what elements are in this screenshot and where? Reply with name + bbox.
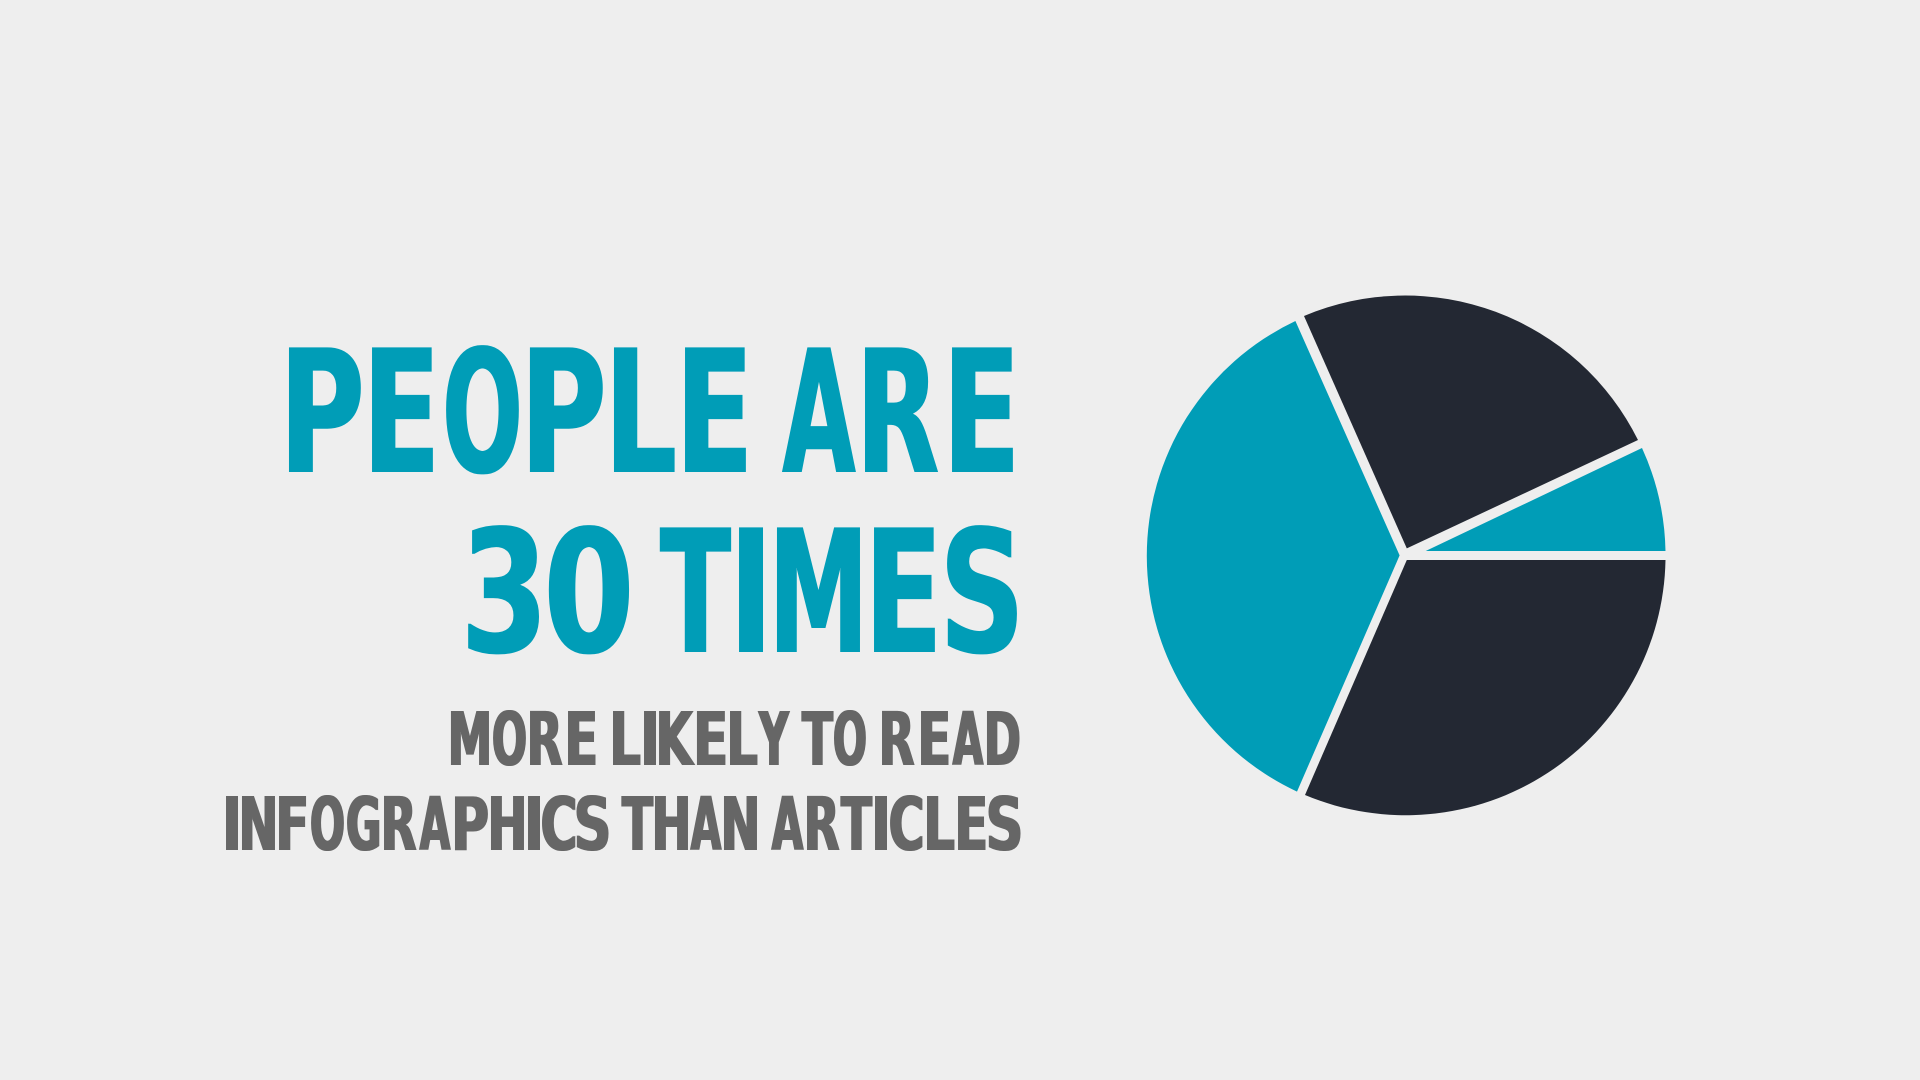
subheading line 2: N bbox=[239, 782, 278, 868]
subheading line 1: K bbox=[656, 697, 695, 783]
subheading line 2: A bbox=[691, 782, 721, 868]
subheading line 2: I bbox=[871, 782, 891, 868]
subheading line 2: E bbox=[954, 782, 988, 868]
subheading line 2: S bbox=[986, 782, 1023, 868]
subheading line 1: O bbox=[833, 697, 867, 783]
subheading line 1: E bbox=[693, 697, 728, 783]
subheading line 2: I bbox=[524, 782, 544, 868]
headline line 1: E bbox=[943, 314, 1020, 513]
subheading line 1: L bbox=[610, 697, 641, 783]
headline line 1: P bbox=[520, 314, 607, 513]
headline line 2: I bbox=[729, 494, 773, 693]
pie chart bbox=[1147, 296, 1666, 815]
subheading line 1: I bbox=[640, 697, 660, 783]
subheading line 1: M bbox=[448, 697, 492, 783]
headline line 1: A bbox=[782, 314, 855, 513]
headline line 2: S bbox=[940, 494, 1025, 693]
headline line 1: E bbox=[363, 314, 440, 513]
subheading line 2: S bbox=[574, 782, 611, 868]
headline line 2: M bbox=[769, 494, 868, 693]
subheading line 1: R bbox=[879, 697, 914, 783]
subheading line 2: O bbox=[310, 782, 345, 868]
pie slice: left teal bbox=[1147, 321, 1400, 792]
subheading line 1: D bbox=[984, 697, 1021, 783]
subheading line 2: H bbox=[652, 782, 691, 868]
subheading line 2: H bbox=[488, 782, 527, 868]
headline line 1: P bbox=[279, 314, 365, 513]
subheading line 2: R bbox=[804, 782, 840, 868]
subheading line 2: F bbox=[276, 782, 309, 868]
headline line 2: 0 bbox=[544, 494, 634, 693]
subheading line 2: T bbox=[841, 782, 872, 868]
headline line 1: O bbox=[442, 314, 523, 513]
subheading line 1: E bbox=[564, 697, 598, 783]
subheading line 1: A bbox=[953, 697, 983, 783]
subheading line 2: R bbox=[381, 782, 416, 868]
subheading line 2: T bbox=[622, 782, 653, 868]
subheading line 1: T bbox=[802, 697, 833, 783]
headline line 2: E bbox=[865, 494, 942, 693]
headline line 1: L bbox=[605, 314, 677, 513]
subheading line 1: O bbox=[492, 697, 527, 783]
subheading line 2: A bbox=[772, 782, 803, 868]
headline line 1: E bbox=[676, 314, 753, 513]
subheading line 2: C bbox=[889, 782, 924, 868]
subheading line 2: L bbox=[924, 782, 955, 868]
subheading line 1: L bbox=[726, 697, 758, 783]
pie slice: top dark bbox=[1304, 296, 1638, 548]
subheading line 2: A bbox=[420, 782, 450, 868]
headline: people are 30 times bbox=[279, 314, 1025, 693]
subheading line 1: E bbox=[918, 697, 951, 783]
subheading line 2: P bbox=[451, 782, 489, 868]
subheading line 2: I bbox=[222, 782, 242, 868]
subheading line 1: Y bbox=[758, 697, 790, 783]
subheading line 1: R bbox=[527, 697, 562, 783]
headline line 2: 3 bbox=[461, 494, 548, 693]
headline line 2: T bbox=[660, 494, 731, 693]
pie slice: bottom dark bbox=[1305, 560, 1666, 815]
headline line 1: R bbox=[856, 314, 939, 513]
subheading line 2: G bbox=[346, 782, 382, 868]
subheading: more likely to read infographics than articles bbox=[222, 697, 1023, 868]
subheading line 2: C bbox=[540, 782, 578, 868]
subheading line 2: N bbox=[721, 782, 760, 868]
pie slice: small teal right bbox=[1426, 448, 1666, 551]
